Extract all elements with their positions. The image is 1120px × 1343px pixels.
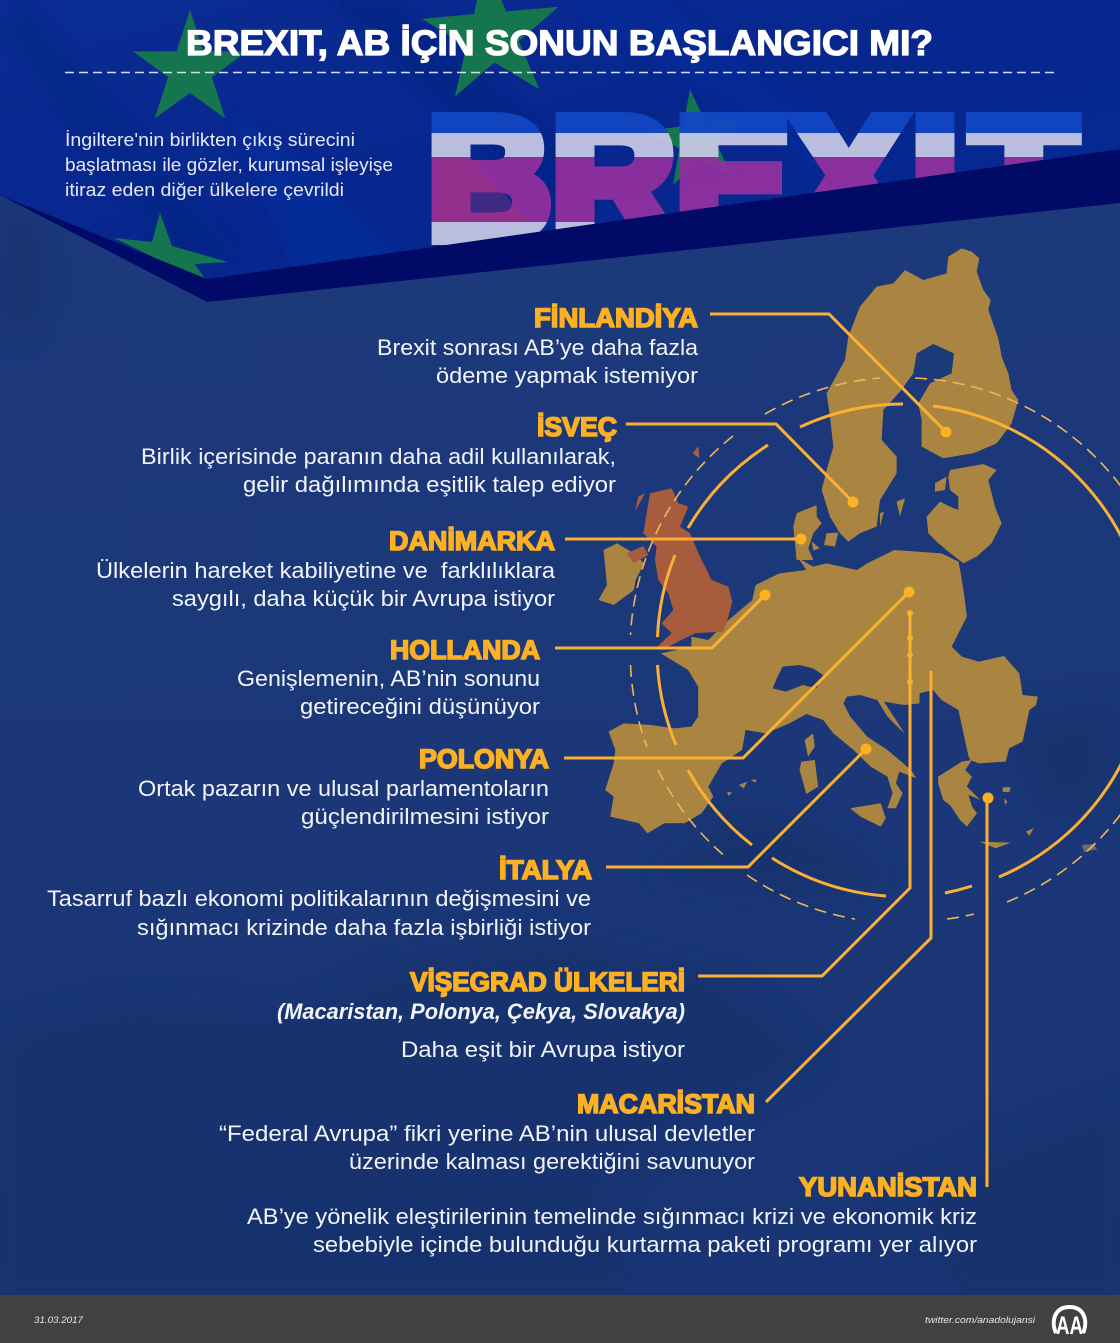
continental Europe — [605, 550, 1038, 833]
leader line: Yunanistan — [982, 792, 994, 1187]
description: Polonya: güçlendirilmesini istiyor — [301, 804, 549, 829]
description: Danimarka — [96, 558, 556, 611]
Ireland — [598, 543, 644, 605]
Denmark — [793, 477, 947, 560]
intro text — [65, 130, 393, 200]
callout: Polonya — [138, 586, 914, 829]
leader line: Polonya — [564, 586, 914, 758]
footer bar — [0, 1295, 1120, 1343]
heading: Finlandiya: FİNLANDİYA — [534, 303, 698, 333]
star: lower left — [114, 213, 228, 278]
BREXIT lettering in Union Jack colours: BREXIT — [427, 81, 1077, 275]
leader line: İsveç — [626, 424, 858, 508]
description: Yunanistan: AB’ye yönelik eleştirilerinin temelinde sığınmacı krizi ve ekonomik kriz — [247, 1204, 977, 1229]
description: Finlandiya — [377, 335, 699, 388]
description: İsveç: gelir dağılımında eşitlik talep ediyor — [243, 472, 616, 497]
description: Yunanistan: sebebiyle içinde bulunduğu kurtarma paketi programı yer alıyor — [313, 1232, 977, 1257]
star: behind lettering — [665, 90, 725, 185]
map of Europe — [598, 248, 1097, 852]
description: Macaristan: “Federal Avrupa” fikri yerine AB’nin ulusal devletler — [219, 1121, 755, 1146]
heading: Danimarka: DANİMARKA — [389, 526, 555, 556]
leader line: Hollanda — [555, 590, 770, 648]
Italian and Balearic islands — [727, 733, 886, 827]
description: İtalya — [47, 886, 591, 940]
description: Macaristan — [219, 1121, 755, 1174]
Switzerland — [773, 665, 823, 692]
BREXIT lettering in Union Jack colours — [432, 112, 1082, 245]
intro text: itiraz eden diğer ülkelere çevrildi — [65, 180, 344, 200]
description: Hollanda — [237, 666, 540, 719]
description: Macaristan: üzerinde kalması gerektiğini savunuyor — [349, 1149, 755, 1174]
leader line: Macaristan — [766, 671, 931, 1102]
flag folds — [250, 4, 556, 266]
dark diagonal band — [0, 149, 1120, 302]
leader line: Vişegrad — [698, 610, 913, 976]
Greece and islands — [938, 760, 1033, 848]
date: 31.03.2017 — [34, 1315, 84, 1325]
heading: İsveç: İSVEÇ — [537, 412, 617, 442]
callout: Finlandiya — [377, 303, 952, 438]
title: BREXIT, AB İÇİN SONUN BAŞLANGICI MI? — [186, 24, 933, 63]
description: Yunanistan — [247, 1204, 977, 1257]
leader line: İtalya — [606, 744, 872, 867]
description: Polonya — [138, 776, 549, 829]
callout: İtalya — [47, 744, 872, 940]
leader line: Danimarka — [565, 534, 806, 544]
heading: Polonya: POLONYA — [419, 744, 549, 774]
description: Vişegrad: Daha eşit bir Avrupa istiyor — [401, 1037, 685, 1062]
heading: Yunanistan: YUNANİSTAN — [799, 1172, 977, 1202]
description: Finlandiya: Brexit sonrası AB’ye daha fazla — [377, 335, 699, 360]
icon: AA logo: AA — [1056, 1312, 1083, 1340]
United Kingdom — [627, 446, 732, 650]
intro text: başlatması ile gözler, kurumsal işleyişe — [65, 155, 393, 175]
heading: Vişegrad Ülkeleri: VİŞEGRAD ÜLKELERİ — [410, 967, 685, 997]
Cyprus — [1082, 844, 1097, 852]
heading: Macaristan: MACARİSTAN — [577, 1089, 755, 1119]
icon: AA logo — [1054, 1307, 1085, 1340]
heading: Hollanda: HOLLANDA — [390, 635, 540, 665]
leader line: Finlandiya — [710, 314, 952, 438]
description: İsveç: Birlik içerisinde paranın daha adil kullanılarak, — [141, 444, 616, 469]
member list: (Macaristan, Polonya, Çekya, Slovakya) — [277, 999, 685, 1024]
callout: Yunanistan — [247, 792, 994, 1257]
description: İsveç — [141, 444, 616, 497]
callout: Macaristan — [219, 671, 931, 1174]
dashed title rule — [65, 72, 1056, 74]
EU flag banner — [0, 0, 1120, 300]
dashed outer circle — [630, 378, 1120, 919]
Baltic states — [927, 464, 1002, 563]
description: Polonya: Ortak pazarın ve ulusal parlamentoların — [138, 776, 549, 801]
description: Danimarka: saygılı, daha küçük bir Avrupa istiyor — [172, 586, 555, 611]
intro text: İngiltere'nin birlikten çıkış sürecini — [65, 130, 355, 150]
Sweden and Finland — [822, 248, 1018, 542]
description: İtalya: sığınmacı krizinde daha fazla işbirliği istiyor — [137, 915, 591, 940]
description: Finlandiya: ödeme yapmak istemiyor — [436, 363, 698, 388]
callout: İsveç — [141, 412, 858, 508]
star: top centre — [422, 0, 558, 96]
description: İtalya: Tasarruf bazlı ekonomi politikalarının değişmesini ve — [47, 886, 591, 911]
description: Hollanda: getireceğini düşünüyor — [300, 694, 540, 719]
twitter handle: twitter.com/anadolujansi — [925, 1315, 1036, 1325]
callout: Hollanda — [237, 590, 770, 719]
callout: Danimarka — [96, 526, 806, 611]
callout: Vişegrad Ülkeleri — [277, 610, 913, 1062]
heading: İtalya: İTALYA — [499, 855, 592, 885]
description: Danimarka: Ülkelerin hareket kabiliyetine ve farklılıklara — [96, 558, 556, 583]
description: Hollanda: Genişlemenin, AB’nin sonunu — [237, 666, 540, 691]
solid inner circle — [658, 404, 1120, 896]
star: top left — [133, 10, 247, 118]
